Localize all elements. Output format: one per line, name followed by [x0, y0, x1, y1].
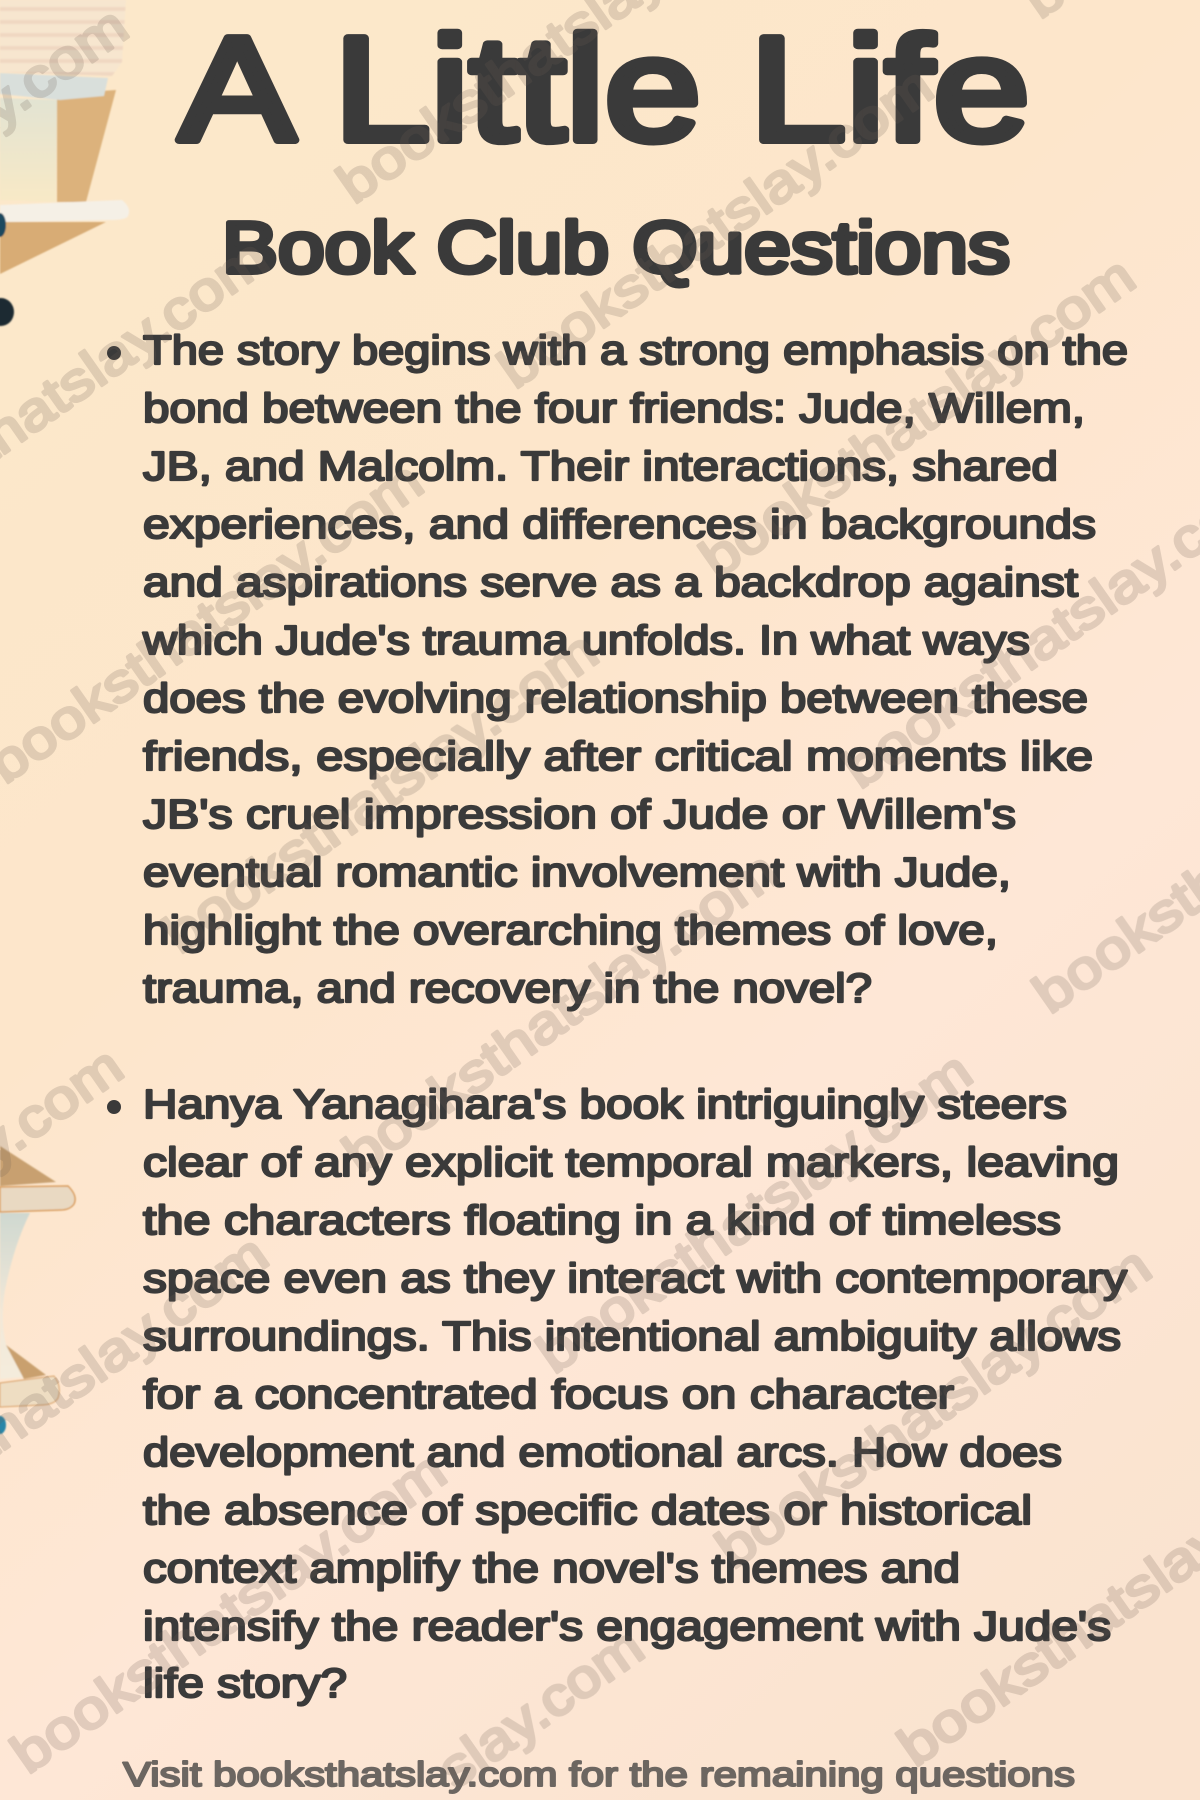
question 2 text: life story?	[143, 1660, 347, 1706]
question 1 text: which Jude's trauma unfolds. In what ways	[142, 617, 1030, 663]
watermarks: booksthatslay.com	[0, 1440, 457, 1785]
question 2 text	[143, 1081, 1128, 1706]
bullet 2	[107, 1100, 121, 1114]
question 1 text: experiences, and differences in backgrounds	[143, 501, 1096, 547]
title: A Little Life	[179, 7, 1030, 172]
illustration: lower book stack	[0, 1146, 75, 1434]
bullet 1	[107, 346, 121, 360]
question 2 text: development and emotional arcs. How does	[143, 1429, 1062, 1475]
question 1 text: JB's cruel impression of Jude or Willem's	[143, 791, 1016, 837]
question 1	[107, 327, 1128, 1011]
question 1 text	[142, 327, 1128, 1011]
watermarks: slay.com	[427, 1616, 654, 1800]
question 2 text: the absence of specific dates or historical	[143, 1487, 1032, 1533]
question 1 text: bond between the four friends: Jude, Willem,	[143, 385, 1085, 431]
question 2 text: surroundings. This intentional ambiguity allows	[143, 1313, 1121, 1359]
question 2 text: context amplify the novel's themes and	[143, 1545, 960, 1591]
footer note: Visit booksthatslay.com for the remaining questions	[123, 1756, 1075, 1794]
question 1 text: does the evolving relationship between these	[143, 675, 1088, 721]
watermarks: booksthatslay.com	[689, 245, 1146, 590]
watermarks: booksthatslay.com	[332, 840, 789, 1185]
watermarks: booksthatslay.com	[705, 1235, 1162, 1580]
illustration: top book stack	[0, 0, 129, 326]
question 1 text: and aspirations serve as a backdrop against	[143, 559, 1079, 605]
watermarks: booksthatslay.com	[487, 55, 944, 400]
question 2 text: for a concentrated focus on character	[143, 1371, 954, 1417]
question 2 text: space even as they interact with contemporary	[143, 1255, 1128, 1301]
question 1 text: The story begins with a strong emphasis on the	[143, 327, 1128, 373]
question 2	[107, 1081, 1128, 1706]
question 1 text: highlight the overarching themes of love,	[143, 907, 998, 953]
question 1 text: eventual romantic involvement with Jude,	[143, 849, 1011, 895]
watermarks: booksthatslay.com	[152, 620, 609, 965]
question 2 text: clear of any explicit temporal markers, leaving	[143, 1139, 1119, 1185]
question 1 text: trauma, and recovery in the novel?	[143, 965, 872, 1011]
question 1 text: JB, and Malcolm. Their interactions, shared	[143, 443, 1058, 489]
subtitle: Book Club Questions	[222, 208, 1010, 288]
question 2 text: intensify the reader's engagement with Jude's	[143, 1603, 1111, 1649]
watermarks: booksthatslay.com	[526, 1040, 983, 1385]
question 2 text: the characters floating in a kind of timeless	[143, 1197, 1061, 1243]
question 1 text: friends, especially after critical moments like	[143, 733, 1093, 779]
question 2 text: Hanya Yanagihara's book intriguingly steers	[143, 1081, 1067, 1127]
